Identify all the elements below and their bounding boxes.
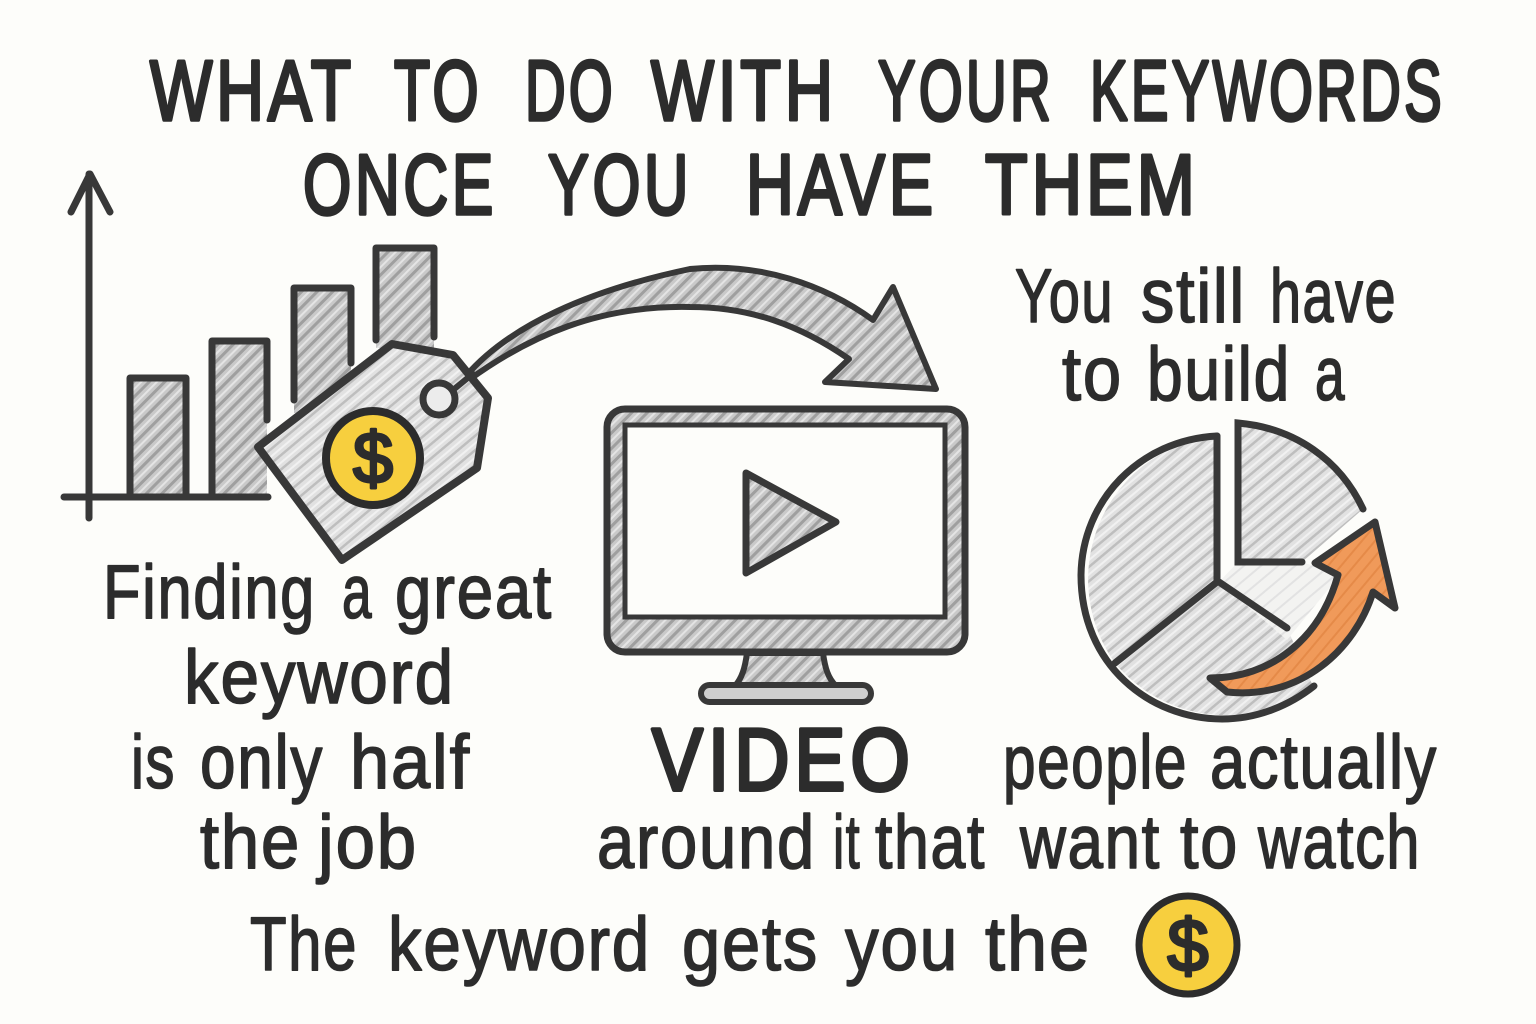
text: the keyword gets you the: gets [682, 902, 819, 987]
text: finding a great keyword is only half the job: a [342, 550, 373, 635]
play icon [746, 473, 836, 573]
title: WHAT [150, 44, 355, 139]
text: finding a great keyword is only half the job: only [200, 720, 324, 805]
text: the keyword gets you the: the [985, 902, 1091, 987]
text: you still have to build a [1015, 254, 1397, 417]
icon: dollar coin [1139, 896, 1237, 994]
text: around it that: it [833, 800, 861, 885]
title: YOU [548, 138, 692, 233]
price tag [258, 344, 488, 560]
monitor screen [625, 425, 945, 617]
monitor base [701, 685, 871, 702]
text: around it that [597, 800, 986, 885]
tag string [453, 372, 475, 390]
text: people actually want to watch: actually [1210, 720, 1438, 805]
icon: dollar coin on tag [326, 411, 420, 505]
title: YOUR [878, 44, 1054, 139]
text: the keyword gets you the [250, 902, 1091, 987]
monitor stand [735, 653, 836, 686]
text: around it that: that [875, 800, 986, 885]
text: you still have to build a: a [1315, 332, 1346, 417]
text: finding a great keyword is only half the job: job [316, 800, 418, 885]
icon: dollar coin on tag: $ [353, 419, 393, 499]
text: finding a great keyword is only half the job [103, 550, 553, 885]
text: you still have to build a: to [1062, 332, 1123, 417]
pie slices [1081, 423, 1363, 719]
text: the keyword gets you the: keyword [388, 902, 651, 987]
text: finding a great keyword is only half the job: is [131, 720, 176, 805]
text: people actually want to watch: to [1180, 800, 1239, 885]
text: you still have to build a: You [1015, 254, 1114, 339]
title: THEM [985, 138, 1199, 233]
title: TO [394, 44, 482, 139]
curved arrow [466, 268, 936, 389]
icon: dollar coin: $ [1167, 904, 1209, 987]
text: you still have to build a: build [1147, 332, 1291, 417]
text: people actually want to watch: watch [1257, 800, 1421, 885]
title: DO [525, 44, 616, 139]
bar chart [64, 174, 434, 518]
orange arrow [1210, 522, 1395, 693]
text: the keyword gets you the: The [250, 902, 358, 987]
monitor with play button [607, 409, 965, 702]
title: WITH [651, 44, 837, 139]
text: you still have to build a: still [1141, 254, 1246, 339]
pie chart with growth arrow [1081, 423, 1395, 719]
text: finding a great keyword is only half the job: Finding [103, 550, 316, 635]
text: people actually want to watch: people [1003, 720, 1188, 805]
text: you still have to build a: have [1270, 254, 1397, 339]
text: people actually want to watch [1003, 720, 1438, 885]
text: around it that: around [597, 800, 816, 885]
title: HAVE [746, 138, 937, 233]
text: people actually want to watch: want [1019, 800, 1161, 885]
text: finding a great keyword is only half the job: keyword [184, 635, 455, 720]
text: video: VIDEO [652, 710, 915, 809]
chart axes [64, 174, 268, 518]
text: finding a great keyword is only half the job: great [395, 550, 553, 635]
monitor body [607, 409, 965, 652]
text: the keyword gets you the: you [845, 902, 959, 987]
text: finding a great keyword is only half the job: half [350, 720, 471, 805]
text: finding a great keyword is only half the job: the [200, 800, 301, 885]
bars [130, 248, 434, 497]
tag hole [423, 383, 455, 415]
title: ONCE [303, 138, 497, 233]
title [150, 44, 1445, 233]
